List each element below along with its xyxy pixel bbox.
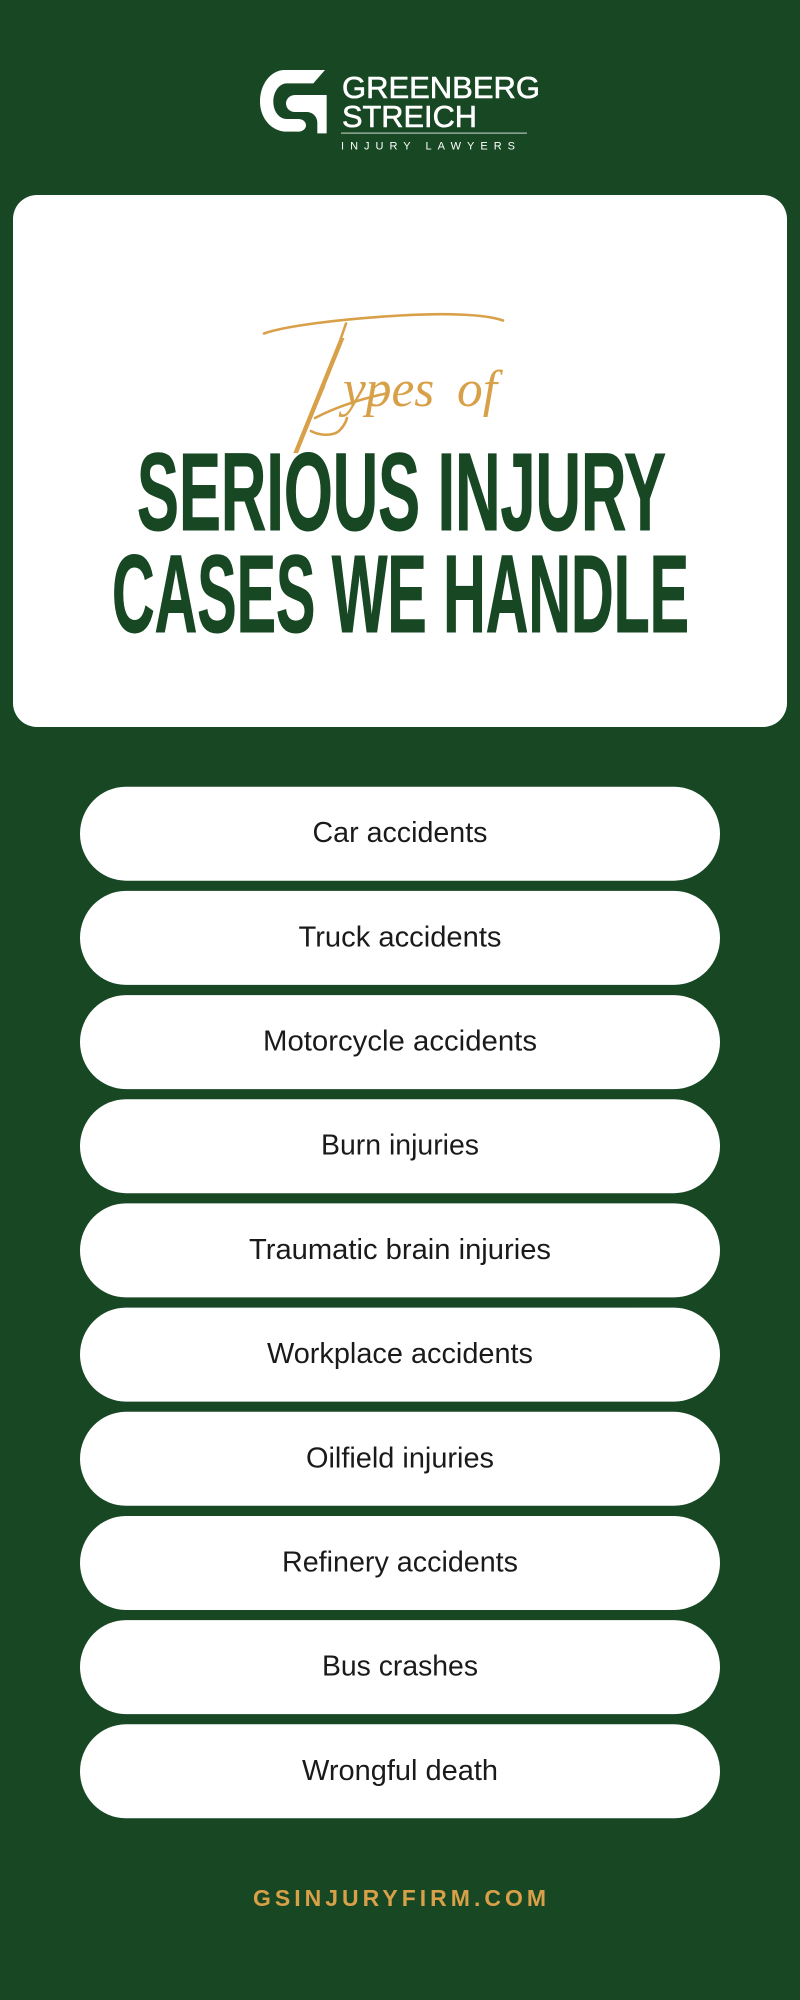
script heading: Types of [262, 312, 504, 453]
pill: Refinery accidents: Refinery accidents [282, 1546, 518, 1578]
icon: G logo mark [260, 70, 327, 133]
logo tagline: INJURY LAWYERS [341, 140, 515, 152]
pill: Burn injuries: Burn injuries [321, 1130, 479, 1162]
pill: Bus crashes: Bus crashes [322, 1651, 478, 1683]
pill: Wrongful death [80, 1724, 720, 1818]
pill: Traumatic brain injuries: Traumatic brain injuries [249, 1234, 551, 1266]
swash over the script capital [264, 314, 503, 440]
script heading: Types of: T [264, 281, 381, 494]
pill: Truck accidents: Truck accidents [298, 921, 502, 953]
pill: Traumatic brain injuries [80, 1203, 720, 1297]
pill: Motorcycle accidents [80, 995, 720, 1089]
pill: Wrongful death: Wrongful death [302, 1755, 498, 1787]
panel: title card [13, 195, 787, 727]
pill: Truck accidents [80, 891, 720, 985]
pill: Refinery accidents [80, 1516, 720, 1610]
pill list: injury case types [80, 787, 720, 1818]
script heading: Types of: ypes of [338, 361, 503, 418]
footer website: GSINJURYFIRM.COM [253, 1885, 546, 1911]
pill: Bus crashes [80, 1620, 720, 1714]
pill: Motorcycle accidents: Motorcycle accidents [263, 1026, 537, 1058]
pill: Workplace accidents [80, 1308, 720, 1402]
pill: Oilfield injuries [80, 1412, 720, 1506]
logo wordmark: Streich: STREICH [342, 99, 477, 134]
pill: Workplace accidents: Workplace accidents [267, 1338, 533, 1370]
pill: Car accidents [80, 787, 720, 881]
pill: Car accidents: Car accidents [312, 817, 488, 849]
pill: Burn injuries [80, 1099, 720, 1193]
logo: Greenberg Streich Injury Lawyers [260, 70, 540, 152]
pill: Oilfield injuries: Oilfield injuries [306, 1442, 494, 1474]
logo wordmark: Greenberg: GREENBERG [342, 70, 540, 105]
